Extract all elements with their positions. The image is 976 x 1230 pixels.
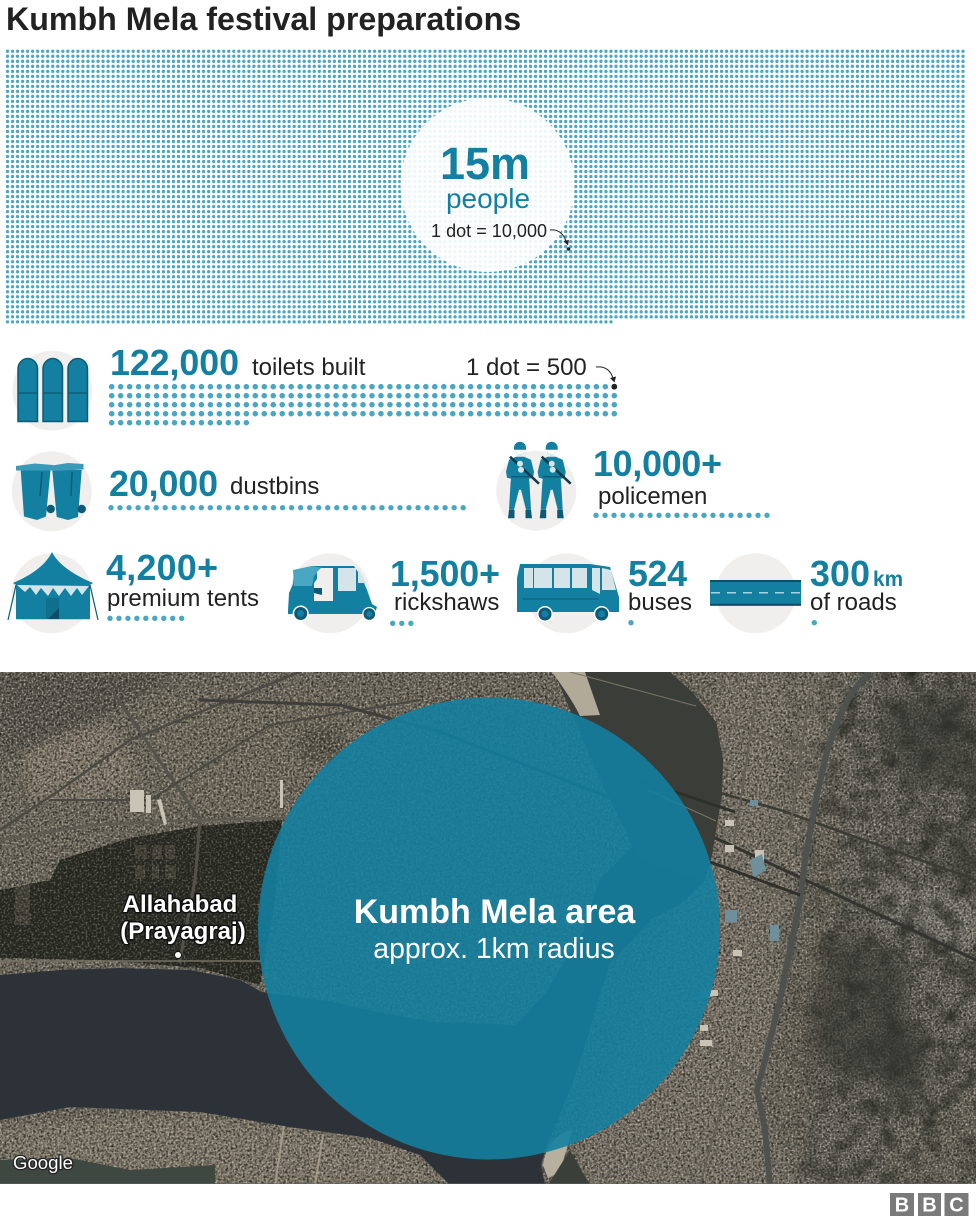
stat: buses: 524 [628, 554, 687, 594]
icon: policemen [496, 442, 576, 531]
stat: roads: of roads [810, 589, 897, 616]
stat: dustbins: dustbins [230, 473, 319, 500]
BBC logo: B [922, 1194, 937, 1216]
city buildings [130, 780, 764, 1046]
title: Kumbh Mela festival preparations [6, 1, 521, 37]
stat: roads [710, 553, 903, 633]
BBC logo: B [895, 1194, 909, 1216]
bridges [570, 672, 716, 821]
BBC logo: C [949, 1194, 964, 1216]
road dot [812, 620, 817, 625]
people callout circle: people [446, 183, 530, 214]
soldier left [506, 442, 539, 518]
forest shade [0, 820, 282, 985]
forest [0, 820, 282, 985]
icon: bus [517, 553, 619, 633]
Kumbh Mela area circle: approx. 1km radius [373, 933, 615, 965]
stat: dustbins: 20,000 [109, 464, 218, 504]
icon: road [710, 553, 801, 633]
soldier right [538, 442, 571, 518]
stat: rickshaws: 1,500+ [390, 554, 500, 594]
stat: rickshaws [288, 553, 500, 633]
sand spits [543, 1130, 572, 1178]
land base [0, 672, 976, 1185]
satellite map [0, 672, 976, 1185]
stat: tents [8, 548, 259, 633]
stat: tents: 4,200+ [106, 548, 218, 588]
east dark tree stands [805, 690, 976, 1110]
toilet dots [112, 384, 617, 423]
icon: toilets [12, 351, 92, 431]
stat: toilets: toilets built [252, 354, 366, 381]
icon: rickshaw [288, 553, 377, 633]
label: Allahabad (Prayagraj): (Prayagraj) [120, 918, 246, 945]
stat: tents: premium tents [107, 585, 259, 612]
east tree mottling [766, 672, 976, 1184]
dustbin dots [111, 505, 464, 510]
map border [0, 1184, 976, 1185]
stat: toilets [12, 343, 617, 431]
river: Yamuna and Ganges [0, 672, 723, 1185]
Google credit: Google [13, 1152, 73, 1173]
label: Allahabad (Prayagraj) [120, 891, 246, 958]
Kumbh Mela area circle: Kumbh Mela area [354, 893, 636, 931]
land patches [0, 672, 976, 1185]
tent dots [110, 616, 182, 621]
people callout circle [400, 98, 574, 272]
stat: policemen: policemen [598, 483, 707, 510]
dot grid: 15m people [8, 51, 965, 322]
stat: dustbins [12, 451, 464, 531]
stat: buses: buses [628, 589, 692, 616]
stat: buses [517, 553, 692, 633]
BBC logo [890, 1193, 968, 1216]
label: Allahabad (Prayagraj): Allahabad [123, 891, 237, 918]
rickshaw dots [393, 621, 412, 626]
texture noise [0, 672, 976, 1185]
canal [757, 672, 870, 1185]
1 dot = 500 key: 1 dot = 500 [466, 354, 587, 381]
Kumbh Mela area circle [258, 698, 720, 1160]
lower water [548, 1150, 590, 1185]
stat: roads: 300 [810, 554, 870, 594]
icon: dustbins [12, 451, 92, 531]
bus dot [628, 620, 634, 625]
stat: policemen [496, 442, 768, 531]
stat: toilets: 122,000 [110, 343, 239, 383]
policemen dots [596, 513, 768, 518]
people callout circle: 15m [440, 138, 530, 189]
people callout circle: 1 dot = 10,000 [431, 221, 547, 241]
stat: rickshaws: rickshaws [394, 589, 499, 616]
stat: roads: km [873, 568, 903, 591]
icon: tent [8, 552, 98, 633]
stat: policemen: 10,000+ [593, 444, 722, 484]
roads [0, 672, 976, 1185]
